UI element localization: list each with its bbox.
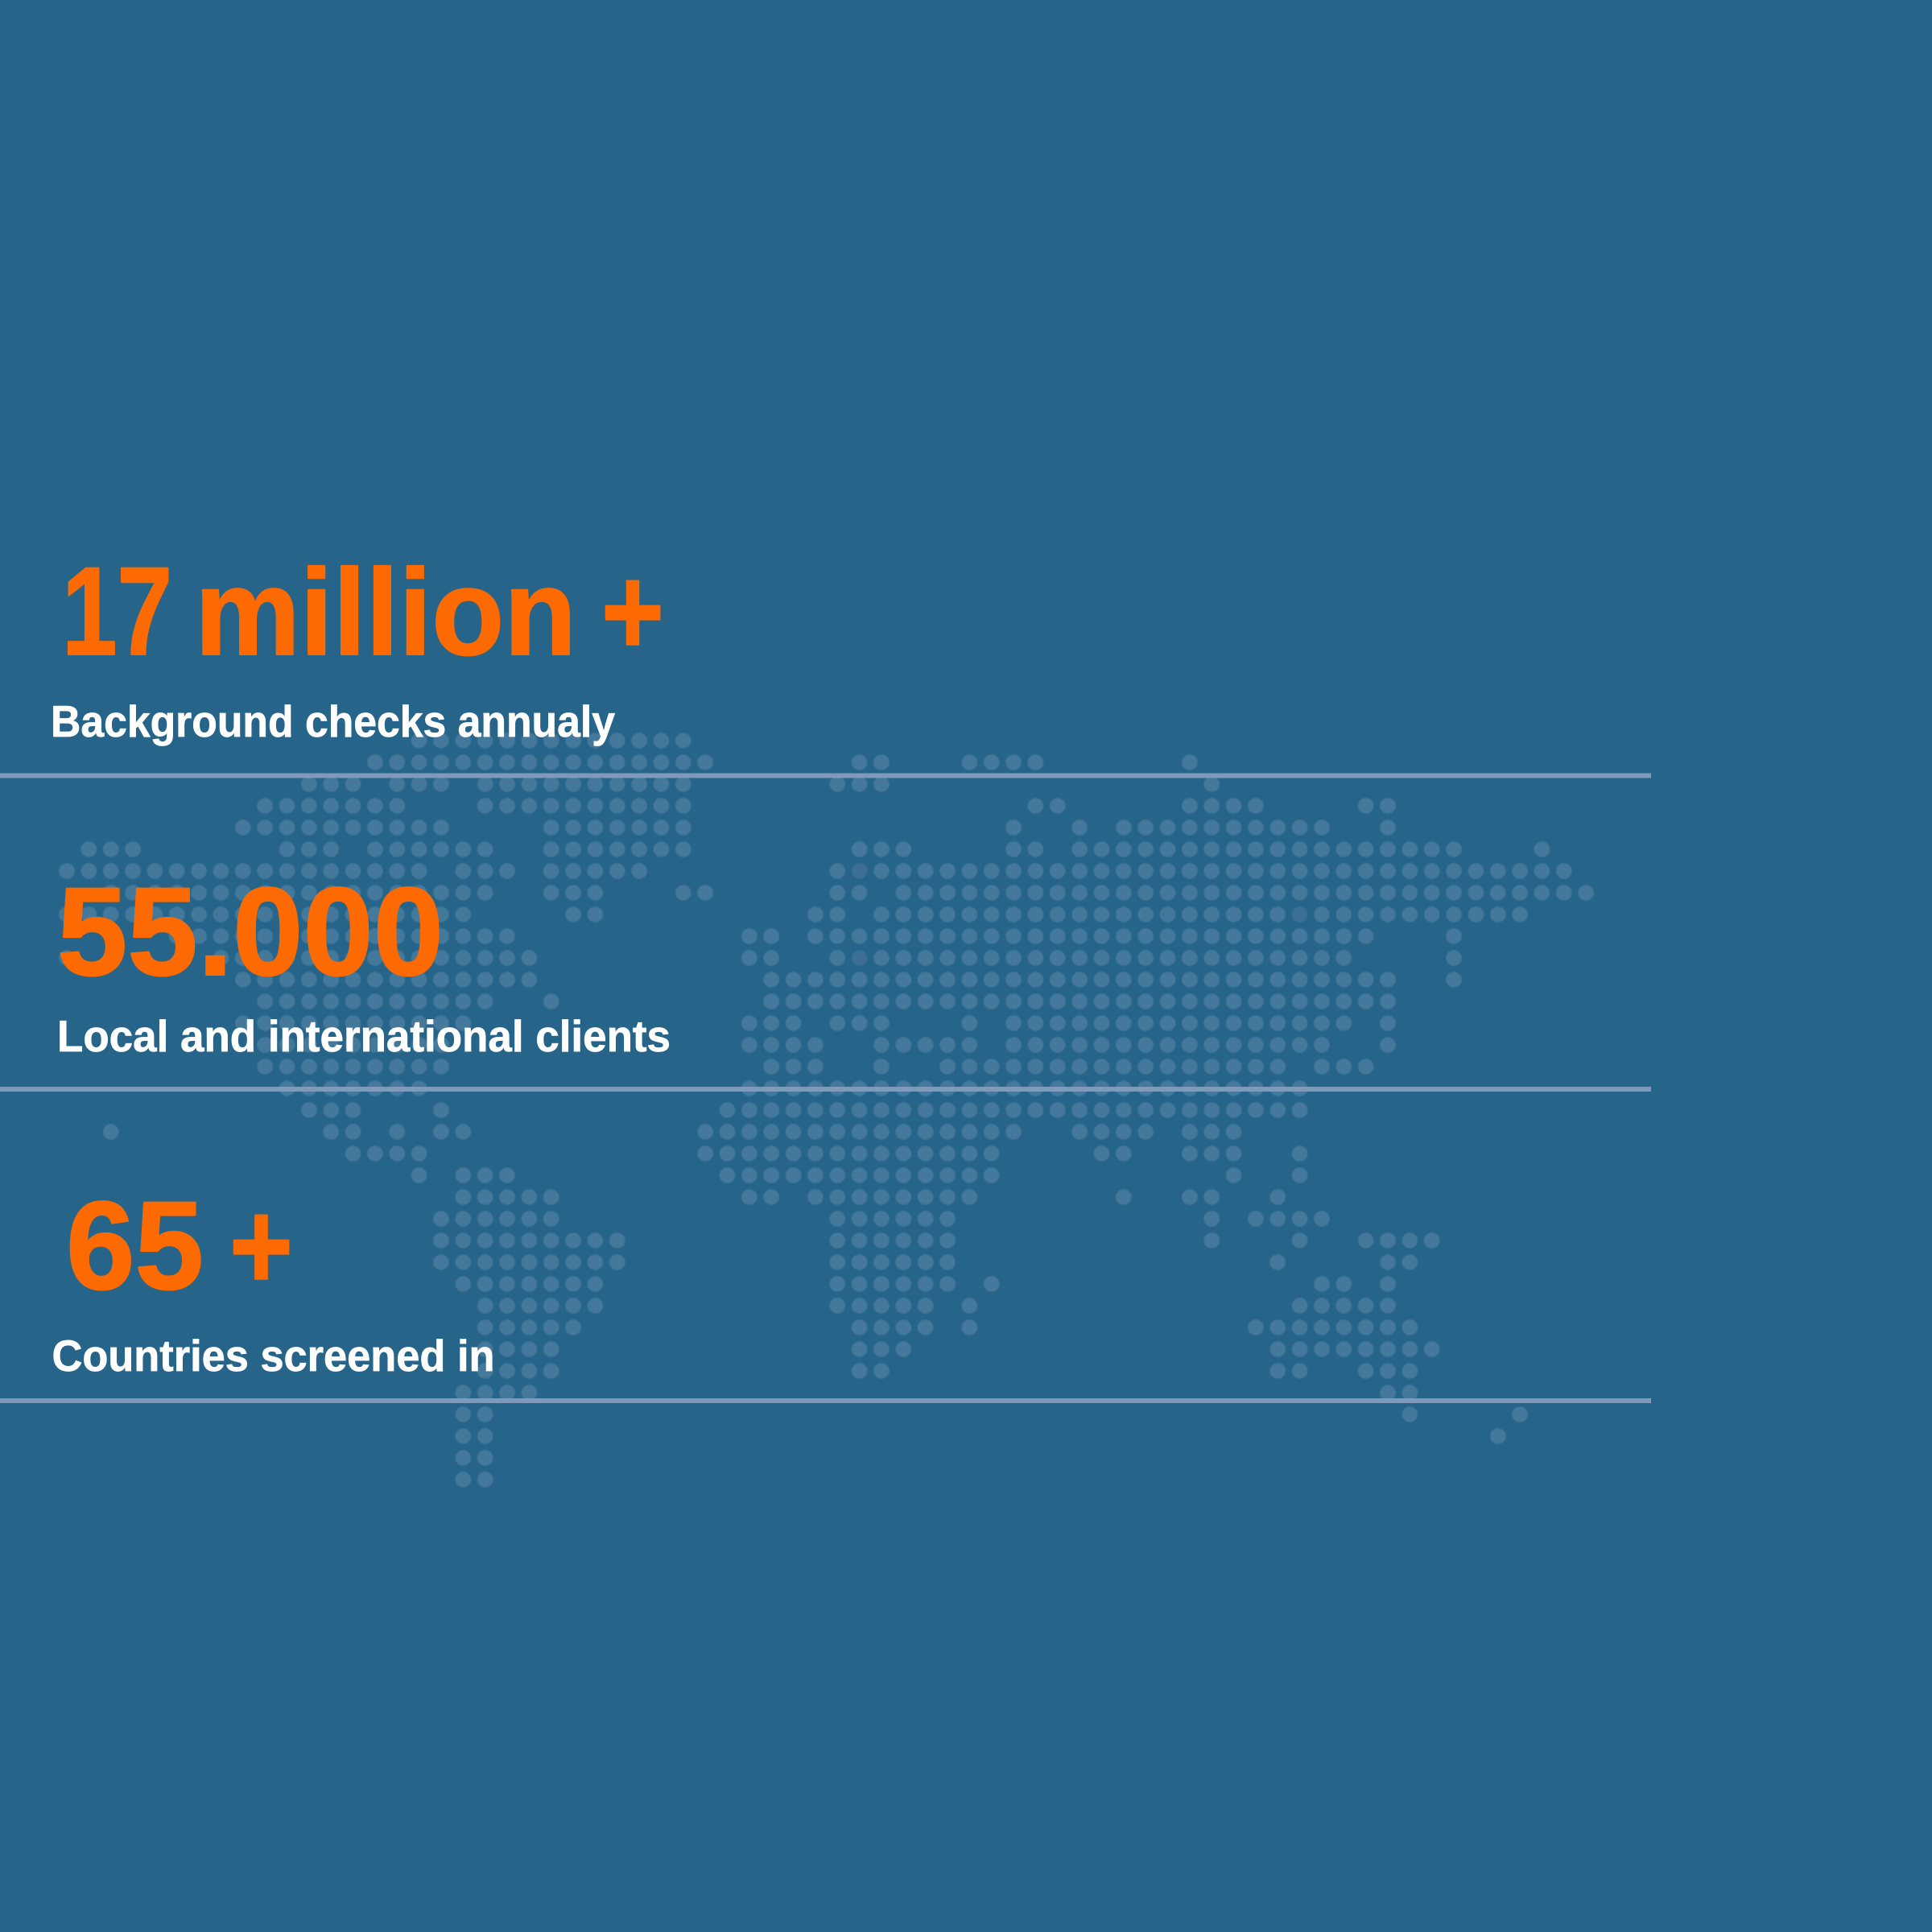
dotted world map [67,741,1586,1480]
stat label: clients: Local and international clients [57,1011,671,1061]
stat number: 17 million +: + [601,542,664,682]
divider lines [0,773,1651,1403]
stat number: 65 + [66,1176,293,1316]
stat number: 17 million +: million [195,544,576,681]
stat number: 65 +: 65 [66,1176,204,1316]
stat number: 17 million + [62,542,664,682]
stat label: countries: Countries screened in [52,1331,494,1381]
stat number: 65 +: + [229,1176,293,1316]
stat number: 17 million +: 17 [62,542,172,682]
stat: countries [52,1176,494,1381]
stat label: background checks: Background checks annualy [51,696,615,746]
stat: clients [57,862,671,1061]
stat number: 55.000: 55.000 [57,862,444,1002]
stat: background checks [51,542,664,746]
